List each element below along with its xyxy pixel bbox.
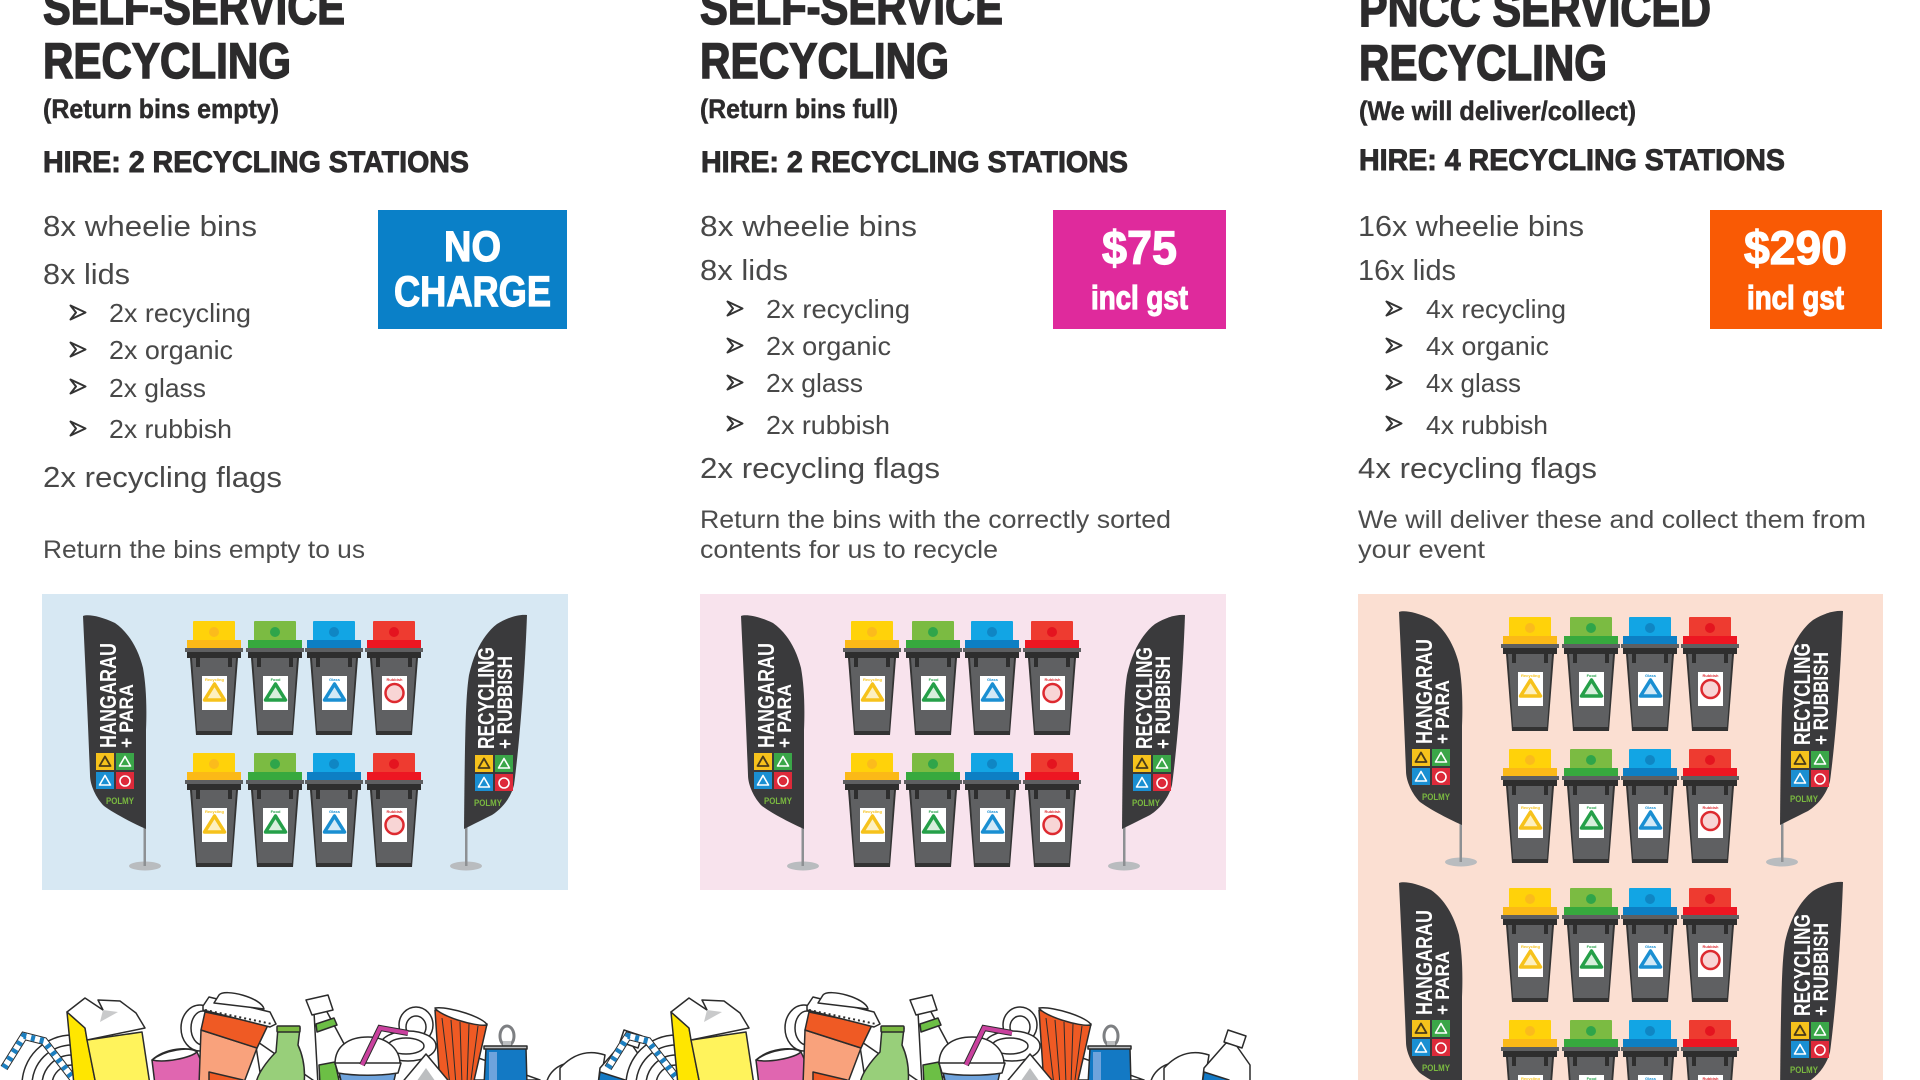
flag: recycling + rubbish [1108, 615, 1185, 870]
flag: recycling + rubbish: RECYCLING [1789, 643, 1815, 745]
flag: hangarau + para: HANGARAU [753, 643, 779, 748]
flag: hangarau + para [83, 615, 161, 870]
flag: hangarau + para [741, 615, 819, 870]
price badge: $290: incl gst [1747, 279, 1844, 316]
flag: hangarau + para: HANGARAU [1411, 639, 1437, 744]
price badge: no charge [378, 210, 567, 329]
hire item list: 4x recycling flags [1358, 453, 1597, 485]
heading: self-service recycling: RECYCLING [43, 33, 291, 89]
panel: self-service, return bins full [700, 0, 1226, 890]
flag: recycling + rubbish: POLMY [474, 798, 502, 808]
flag: hangarau + para: POLMY [106, 796, 134, 806]
flag: hangarau + para: + PARA [775, 684, 796, 748]
price badge: $290 [1710, 210, 1882, 329]
flag: recycling + rubbish: + RUBBISH [1810, 652, 1833, 745]
flag: hangarau + para: POLMY [1422, 792, 1450, 802]
hire item list: 2x rubbish [109, 414, 232, 444]
hire item list: 2x recycling flags [700, 453, 940, 485]
flag: recycling + rubbish [1766, 611, 1843, 866]
illustration: recycling station, blue background [42, 594, 568, 890]
bins, two rows of four [1501, 617, 1739, 863]
flag: recycling + rubbish: + RUBBISH [1152, 656, 1175, 749]
hire item list: 2x organic [109, 335, 233, 365]
subheading: (Return bins full) [700, 94, 898, 124]
subheading: (We will deliver/collect) [1359, 96, 1636, 126]
flag: recycling + rubbish (second station): + RUBBISH [1810, 923, 1833, 1016]
price badge: $75 [1053, 210, 1226, 329]
illustration: recycling station, pink background [700, 594, 1226, 890]
hire item list: 2x rubbish [766, 410, 890, 440]
heading: PNCC serviced recycling [1359, 0, 1711, 91]
hire item list: 2x recycling [109, 298, 251, 328]
flag: hangarau + para: HANGARAU [95, 643, 121, 748]
flag: hangarau + para [1399, 611, 1477, 866]
hire item list: 8x wheelie bins [700, 211, 917, 243]
hire heading: HIRE: 2 RECYCLING STATIONS [701, 146, 1128, 179]
flag: recycling + rubbish: POLMY [1132, 798, 1160, 808]
heading: self-service recycling [43, 0, 345, 89]
flag: recycling + rubbish [450, 615, 527, 870]
panel: self-service, return bins empty [42, 0, 568, 890]
hire item list: 8x lids [700, 255, 788, 287]
hire item list [700, 211, 940, 485]
flag: hangarau + para (second station): HANGARAU [1411, 910, 1437, 1015]
flag: hangarau + para (second station): + PARA [1433, 951, 1454, 1015]
subheading: (Return bins empty) [43, 94, 279, 124]
description: We will deliver these and collect them from [1358, 506, 1866, 534]
price badge: $75: $75 [1102, 221, 1177, 274]
hire item list: 2x glass [109, 373, 206, 403]
description: Return the bins with the correctly sorted [700, 506, 1171, 534]
heading: self-service recycling: RECYCLING [700, 33, 949, 89]
flag: recycling + rubbish (second station) [1766, 882, 1843, 1080]
hire item list: 8x wheelie bins [43, 211, 257, 243]
description [700, 506, 1171, 564]
price badge: $75: incl gst [1091, 279, 1188, 316]
flag: recycling + rubbish (second station): POLMY [1790, 1065, 1818, 1075]
flag: recycling + rubbish: + RUBBISH [494, 656, 517, 749]
flag: recycling + rubbish: RECYCLING [473, 647, 499, 749]
flag: hangarau + para: + PARA [1433, 680, 1454, 744]
panel: PNCC serviced recycling [1358, 0, 1883, 1080]
hire item list: 2x recycling [766, 294, 910, 324]
heading: PNCC serviced recycling: RECYCLING [1359, 35, 1607, 91]
hire item list: 4x glass [1426, 368, 1521, 398]
flag: recycling + rubbish (second station): RECYCLING [1789, 914, 1815, 1016]
description: Return the bins empty to us [43, 536, 365, 564]
flag: recycling + rubbish: RECYCLING [1131, 647, 1157, 749]
hire item list [43, 211, 282, 494]
hire item list: 4x rubbish [1426, 410, 1548, 440]
description: contents for us to recycle [700, 536, 998, 564]
heading: self-service recycling [700, 0, 1003, 89]
hire item list: 4x recycling [1426, 294, 1566, 324]
price badge: no charge: CHARGE [394, 268, 551, 316]
flag: hangarau + para (second station): POLMY [1422, 1063, 1450, 1073]
hire item list: 16x lids [1358, 255, 1456, 287]
hire item list: 8x lids [43, 259, 130, 291]
bins, two rows of four [843, 621, 1081, 867]
flag: hangarau + para: POLMY [764, 796, 792, 806]
hire item list: 2x organic [766, 331, 891, 361]
illustration: two recycling stations, peach background [1358, 594, 1883, 1080]
flag: recycling + rubbish: POLMY [1790, 794, 1818, 804]
description [1358, 506, 1866, 564]
flag: hangarau + para (second station) [1399, 882, 1477, 1080]
price badge: $290: $290 [1744, 221, 1847, 274]
hire heading: HIRE: 4 RECYCLING STATIONS [1359, 144, 1785, 177]
hire heading: HIRE: 2 RECYCLING STATIONS [43, 146, 469, 179]
hire item list: 4x organic [1426, 331, 1549, 361]
bins, two rows of four (second station) [1501, 888, 1739, 1080]
hire item list [1358, 211, 1597, 485]
flag: hangarau + para: + PARA [117, 684, 138, 748]
description: your event [1358, 536, 1485, 564]
litter illustration along the bottom edge [4, 993, 1250, 1080]
hire item list: 2x recycling flags [43, 462, 282, 494]
hire item list: 2x glass [766, 368, 863, 398]
hire item list: 16x wheelie bins [1358, 211, 1584, 243]
price badge: no charge: NO [444, 223, 501, 271]
bins, two rows of four [185, 621, 423, 867]
